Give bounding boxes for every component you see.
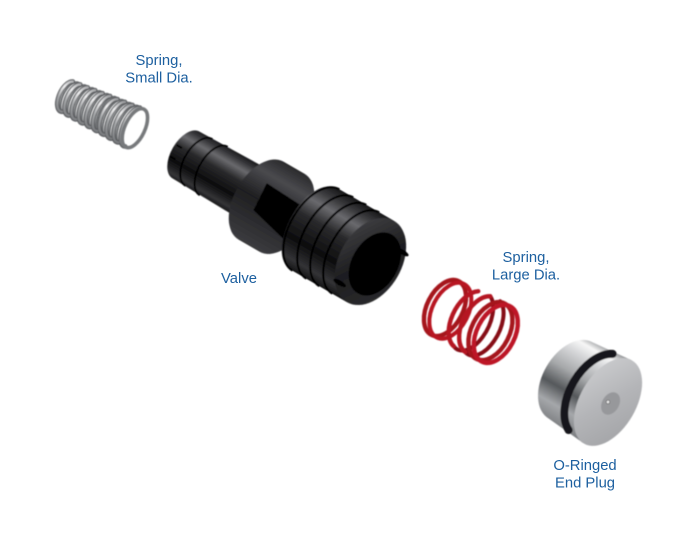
icon: O-ringed end plug [523, 325, 656, 458]
label: end plug: End Plug [555, 476, 615, 492]
label: large spring: Spring, [503, 250, 549, 266]
center hole [597, 389, 624, 418]
icon: valve [150, 107, 421, 318]
label: small spring: Small Dia. [125, 70, 193, 86]
machined flat and neck [246, 176, 337, 258]
end face [560, 346, 656, 458]
icon: large diameter red spring [415, 272, 527, 370]
grooved head [268, 175, 421, 318]
label: valve: Valve [221, 271, 257, 287]
left cylinder [159, 122, 283, 228]
label: large spring: Large Dia. [492, 268, 560, 284]
label: small spring: Spring, [136, 53, 182, 69]
icon: small diameter spring [51, 74, 153, 151]
label: end plug: O-Ringed [553, 458, 617, 474]
flange [215, 148, 328, 265]
O-ring [552, 344, 613, 430]
plug body [523, 325, 632, 444]
